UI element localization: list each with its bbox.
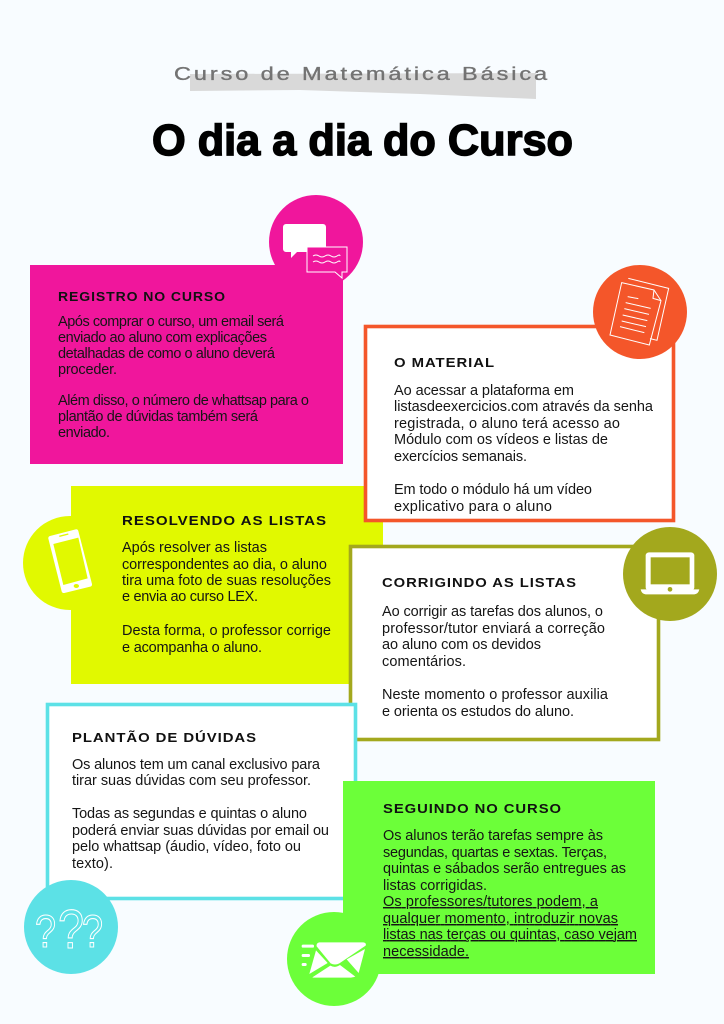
heading: REGISTRO NO CURSO <box>58 290 226 304</box>
body text: Os professores/tutores podem, a <box>383 894 599 910</box>
icon: envelope <box>302 942 366 978</box>
body text: listas nas terças ou quintas, caso vejam <box>383 927 637 943</box>
panel: plantão de dúvidas <box>24 704 356 974</box>
icon: question marks: ? <box>82 906 103 957</box>
body text: e orienta os estudos do aluno. <box>382 704 574 720</box>
body text: necessidade. <box>383 944 469 960</box>
icon circle: yellow <box>23 516 117 610</box>
body text: pelo whattsap (áudio, vídeo, foto ou <box>72 839 301 855</box>
icon: laptop <box>641 552 699 594</box>
body text: Ao acessar a plataforma em <box>394 383 574 399</box>
panel background: green <box>343 781 655 974</box>
body text: Em todo o módulo há um vídeo <box>394 482 592 498</box>
icon circle: green <box>287 912 381 1006</box>
body text: quintas e sábados serão entregues as <box>383 861 626 877</box>
body text: texto). <box>72 856 113 872</box>
body text: ao aluno com os devidos <box>382 637 541 653</box>
body text <box>383 828 637 960</box>
panel: o material <box>366 265 687 520</box>
body text: plantão de dúvidas também será <box>58 409 259 425</box>
panel: registro no curso <box>30 195 363 464</box>
body text: segundas, quartas e sextas. Terças, <box>383 845 607 861</box>
icon: documents <box>610 278 669 345</box>
body text: enviado ao aluno com explicações <box>58 330 267 346</box>
body text: listas corrigidas. <box>383 878 487 894</box>
icon circle: olive <box>623 527 717 621</box>
body text: detalhadas de como o aluno deverá <box>58 346 276 362</box>
body text: listasdeexercicios.com através da senha <box>394 399 654 415</box>
body text: Neste momento o professor auxilia <box>382 687 609 703</box>
body text: Os alunos tem um canal exclusivo para <box>72 757 321 773</box>
body text: Todas as segundas e quintas o aluno <box>72 806 307 822</box>
body text: proceder. <box>58 362 117 378</box>
body text <box>382 604 609 720</box>
body text: qualquer momento, introduzir novas <box>383 911 618 927</box>
icon circle: pink <box>269 195 363 289</box>
heading: O MATERIAL <box>394 356 495 370</box>
body text: tirar suas dúvidas com seu professor. <box>72 773 311 789</box>
heading: SEGUINDO NO CURSO <box>383 802 562 816</box>
icon: question marks: ? <box>35 906 56 957</box>
body text: e envia ao curso LEX. <box>122 589 258 605</box>
panel frame: cyan <box>48 704 356 898</box>
body text: explicativo para o aluno <box>394 499 552 515</box>
body text: registrada, o aluno terá acesso ao <box>394 416 620 432</box>
icon: chat bubbles <box>283 224 347 278</box>
panel frame: orange <box>366 326 674 520</box>
body text: Ao corrigir as tarefas dos alunos, o <box>382 604 603 620</box>
body text: correspondentes ao dia, o aluno <box>122 557 327 573</box>
panel background: pink <box>30 265 343 464</box>
body text: Após comprar o curso, um email será <box>58 314 285 330</box>
subtitle: Curso de Matemática Básica <box>174 64 550 84</box>
body text <box>122 540 331 656</box>
icon: question marks: ? <box>58 898 84 960</box>
body text <box>72 757 329 872</box>
body text: Desta forma, o professor corrige <box>122 623 331 639</box>
body text: tira uma foto de suas resoluções <box>122 573 331 589</box>
body text: Os alunos terão tarefas sempre às <box>383 828 603 844</box>
body text <box>58 314 309 441</box>
panel frame: olive <box>350 546 658 740</box>
heading: CORRIGINDO AS LISTAS <box>382 576 577 590</box>
panel: corrigindo as listas <box>350 527 717 740</box>
body text: enviado. <box>58 425 110 441</box>
heading: RESOLVENDO AS LISTAS <box>122 514 327 528</box>
panel: seguindo no curso <box>287 781 655 1006</box>
subtitle highlight <box>190 73 536 99</box>
body text: Além disso, o número de whattsap para o <box>58 393 309 409</box>
body text: exercícios semanais. <box>394 449 527 465</box>
title: O dia a dia do Curso <box>152 116 573 165</box>
body text: professor/tutor enviará a correção <box>382 621 605 637</box>
panel background: yellow <box>71 486 383 684</box>
body text <box>394 383 654 515</box>
icon circle: orange <box>593 265 687 359</box>
body text: comentários. <box>382 654 466 670</box>
icon circle: cyan <box>24 880 118 974</box>
panel: resolvendo as listas <box>23 486 383 684</box>
body text: Módulo com os vídeos e listas de <box>394 432 608 448</box>
icon: smartphone <box>48 529 92 593</box>
icon: question marks <box>35 898 103 960</box>
body text: poderá enviar suas dúvidas por email ou <box>72 823 329 839</box>
heading: PLANTÃO DE DÚVIDAS <box>72 730 257 745</box>
body text: e acompanha o aluno. <box>122 640 262 656</box>
body text: Após resolver as listas <box>122 540 267 556</box>
